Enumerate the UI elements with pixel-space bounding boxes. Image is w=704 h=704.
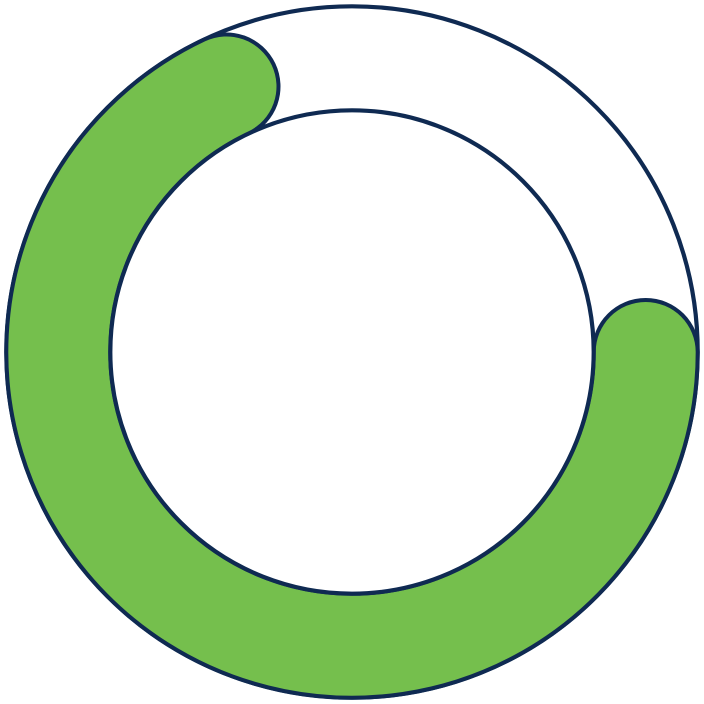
inner ring outline bbox=[110, 110, 594, 594]
progress arc bbox=[58, 86, 646, 646]
